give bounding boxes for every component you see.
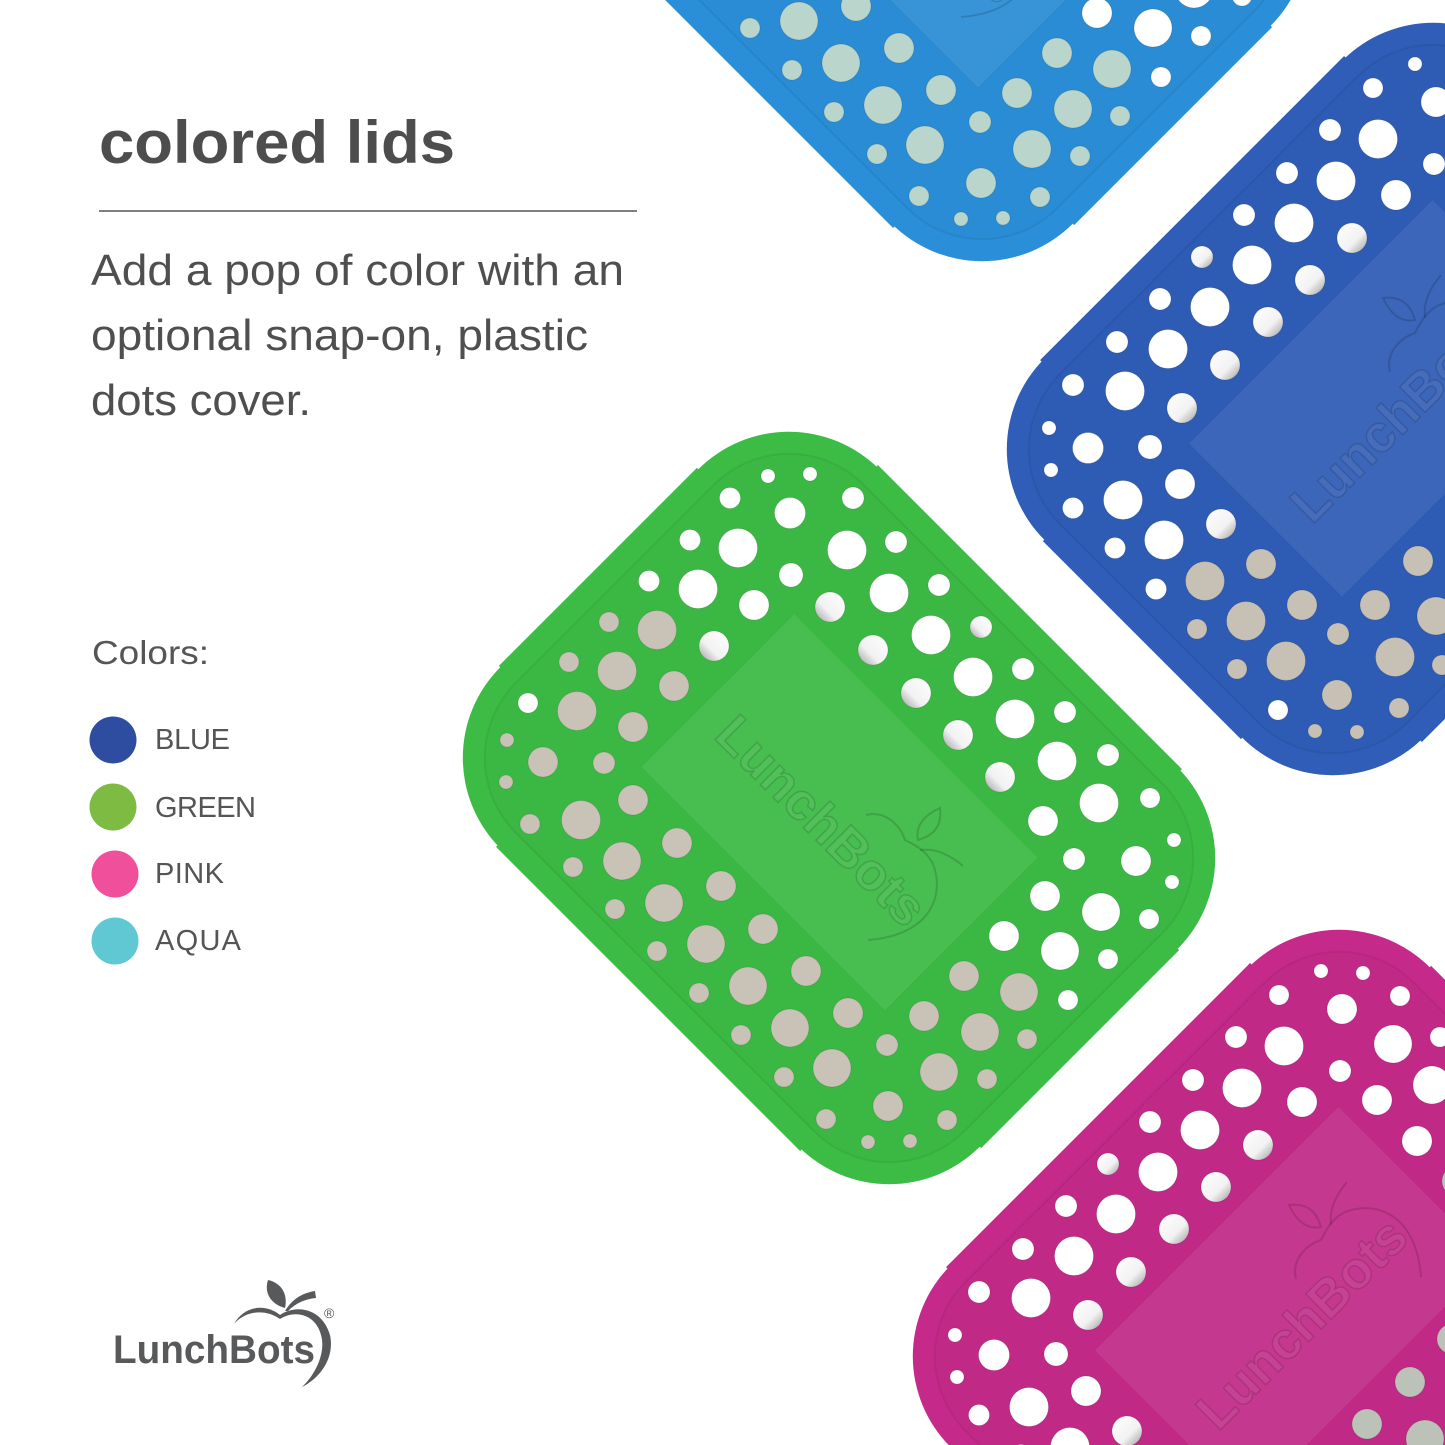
legend item: blue: BLUE — [155, 724, 230, 756]
brand logo: LunchBots — [113, 1328, 315, 1372]
legend heading: Colors: — [92, 634, 209, 671]
legend item: green — [90, 784, 256, 830]
brand logo: ® — [324, 1305, 335, 1321]
description text — [91, 246, 624, 425]
description text: optional snap-on, plastic — [91, 311, 588, 360]
legend item: pink — [92, 850, 225, 898]
description text: dots cover. — [91, 376, 311, 425]
embossed logo: green lid: LunchBots — [704, 705, 938, 938]
legend item: blue — [90, 716, 230, 764]
legend item: aqua: AQUA — [155, 925, 242, 957]
color legend — [90, 634, 256, 964]
legend item: aqua — [92, 918, 242, 964]
embossed logo: pink lid: LunchBots — [1186, 1207, 1419, 1441]
title: colored lids — [99, 109, 455, 176]
brand logo — [113, 1280, 335, 1387]
legend item: pink: PINK — [155, 858, 225, 890]
description text: Add a pop of color with an — [91, 246, 624, 295]
legend item: green: GREEN — [155, 792, 256, 824]
